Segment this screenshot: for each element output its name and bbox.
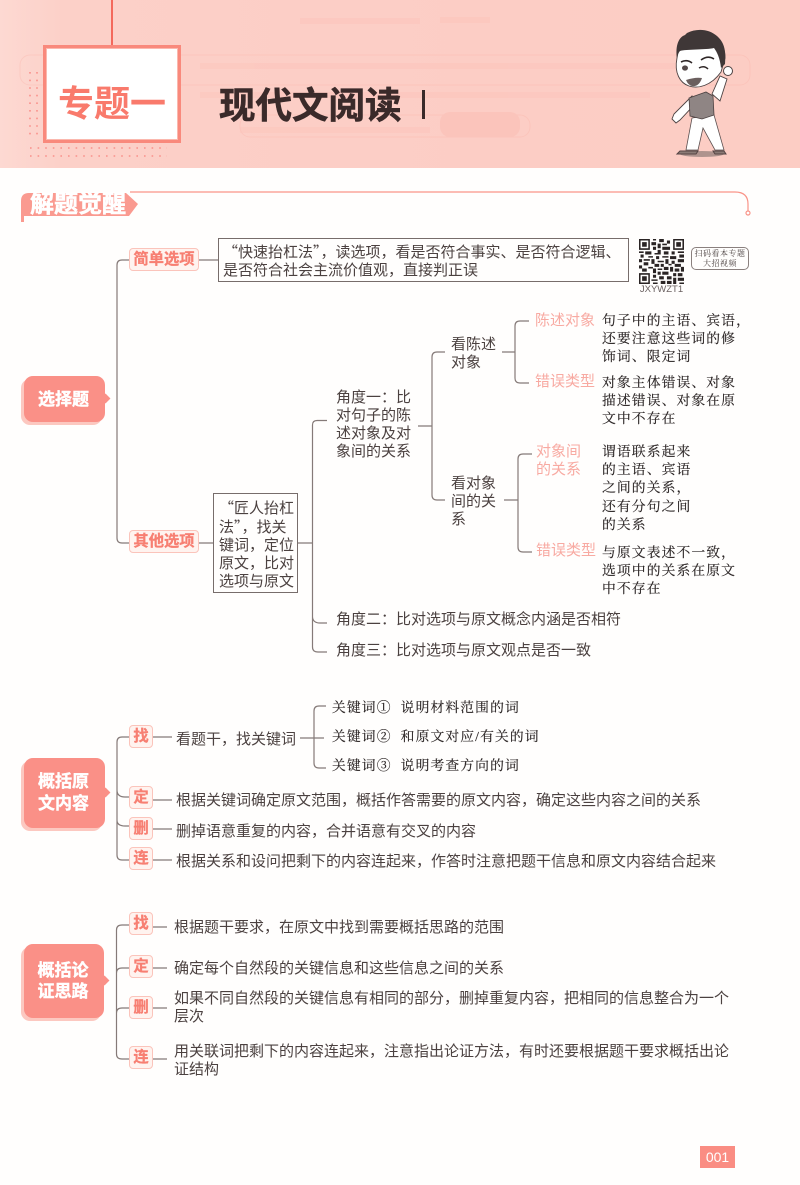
text box: 匠人抬杠法: “匠人抬杠: [219, 497, 294, 518]
text: 对象间的关系说明: 谓语联系起来: [602, 444, 691, 459]
panel: 概括论证思路: 概括论: [38, 961, 88, 980]
title box: 专题一: 专题一: [58, 83, 166, 124]
title bar: [422, 90, 425, 119]
text: 错误类型二说明: 中不存在: [602, 581, 662, 596]
text: 对象间的关系说明: 的关系: [602, 517, 647, 532]
text: 删 说明: [174, 990, 729, 1025]
text: 角度一: 述对象及对: [336, 425, 411, 442]
page number: [700, 1146, 735, 1168]
tag: 删: [129, 996, 153, 1019]
text: 错误类型一说明: [602, 375, 736, 426]
text: 角度一: 对句子的陈: [336, 407, 411, 424]
tag: 其他选项: [129, 530, 199, 553]
text: 删 说明: 层次: [174, 1008, 204, 1025]
panel: 概括论证思路: 证思路: [38, 982, 88, 1001]
label: 对象间的关系: 的关系: [536, 461, 581, 478]
header band: [0, 0, 800, 168]
text: 错误类型二说明: 与原文表述不一致，: [602, 545, 736, 560]
title: 现代文阅读: 现代文阅读: [219, 85, 402, 126]
text: 看陈述对象: 看陈述: [451, 336, 496, 353]
dot pattern: [29, 72, 167, 157]
text: 定 说明: 确定每个自然段的关键信息和这些信息之间的关系: [174, 960, 504, 977]
text: 错误类型二说明: 选项中的关系在原文: [602, 563, 736, 578]
tag: 简单选项: 简单选项: [133, 251, 195, 268]
panel: 概括原文内容: 概括原: [38, 772, 89, 791]
text: 看对象间的关系: 间的关: [451, 493, 496, 510]
text box: 匠人抬杠法: 原文，比对: [219, 555, 294, 572]
page number: 001: [706, 1149, 729, 1165]
text: 连 说明: 根据关系和设问把剩下的内容连起来，作答时注意把题干信息和原文内容结合起来: [176, 853, 716, 870]
tag: 定: [129, 786, 153, 809]
panel: 概括原文内容: [24, 758, 105, 828]
QR note: 大招视频: [703, 259, 737, 268]
text: 错误类型一说明: 文中不存在: [602, 411, 676, 426]
text: 错误类型一说明: 描述错误、对象在原: [602, 393, 736, 408]
text: 看对象间的关系: 系: [451, 511, 466, 528]
text box: 快速抬杠法: 是否符合社会主流价值观，直接判正误: [223, 262, 478, 279]
text box: 快速抬杠法: “快速抬杠法”，读选项，看是否符合事实、是否符合逻辑、: [223, 241, 621, 262]
tag: 连: 连: [133, 1049, 149, 1066]
label: 陈述对象: 陈述对象: [535, 312, 595, 329]
text: 角度三: 角度三：比对选项与原文观点是否一致: [336, 642, 591, 659]
tag: 找: 找: [133, 728, 149, 745]
tag: 连: [129, 1046, 153, 1069]
text box: 匠人抬杠法: 键词，定位: [219, 537, 294, 554]
tag: 连: [129, 847, 153, 870]
text: 陈述对象说明: [602, 313, 751, 364]
text box: 快速抬杠法: [218, 238, 629, 282]
label: 错误类型二: 错误类型: [536, 542, 596, 559]
tag: 简单选项: [129, 248, 199, 271]
panel: 选择题: [24, 376, 105, 422]
text: 关键词②: 关键词② 和原文对应/有关的词: [332, 729, 540, 744]
tag: 连: 连: [133, 850, 149, 867]
tag: 删: 删: [133, 820, 149, 837]
text: 看对象间的关系: 看对象: [451, 475, 496, 492]
text: 错误类型一说明: 对象主体错误、对象: [602, 375, 736, 390]
text: 角度一: [336, 389, 411, 460]
text: 删 说明: 删掉语意重复的内容，合并语意有交叉的内容: [176, 823, 476, 840]
text: 错误类型二说明: [602, 545, 736, 596]
text: 角度二: 角度二：比对选项与原文概念内涵是否相符: [336, 611, 621, 628]
tag: 删: 删: [133, 999, 149, 1016]
text: 对象间的关系说明: 的主语、宾语: [602, 462, 691, 477]
label: 错误类型一: 错误类型: [535, 373, 595, 390]
text: 删 说明: 如果不同自然段的关键信息有相同的部分，删掉重复内容，把相同的信息整合为一个: [174, 990, 729, 1007]
text: 角度一: 象间的关系: [336, 443, 411, 460]
text: 看陈述对象: 对象: [451, 354, 481, 371]
hanging line: [111, 0, 112, 46]
text: 陈述对象说明: 饰词、限定词: [602, 349, 691, 364]
text: 对象间的关系说明: [602, 444, 691, 532]
text: 定 说明: 根据关键词确定原文范围，概括作答需要的原文内容，确定这些内容之间的关系: [176, 792, 701, 809]
text: 看陈述对象: [451, 336, 496, 371]
tag: 找: [129, 912, 153, 935]
icon: QR code: [639, 239, 684, 284]
tag: 找: [129, 725, 153, 748]
tag: 定: 定: [133, 789, 149, 806]
tag: 定: [129, 955, 153, 978]
text: 连 说明: 用关联词把剩下的内容连起来，注意指出论证方法，有时还要根据题干要求概括出论: [174, 1043, 729, 1060]
text: 找 说明: 根据题干要求，在原文中找到需要概括思路的范围: [174, 919, 504, 936]
panel: 概括原文内容: 文内容: [38, 794, 89, 813]
QR caption: JXYWZT1: [640, 284, 683, 295]
text: 对象间的关系说明: 还有分句之间: [602, 499, 691, 514]
panel: 选择题: 选择题: [38, 390, 89, 409]
text box: 匠人抬杠法: 法”，找关: [219, 516, 287, 537]
tag: 其他选项: 其他选项: [133, 533, 195, 550]
text: 关键词①: 关键词① 说明材料范围的词: [332, 700, 520, 715]
text: 陈述对象说明: 句子中的主语、宾语，: [602, 313, 751, 328]
QR note: 扫码看本专题: [694, 249, 746, 258]
tag: 找: 找: [133, 915, 149, 932]
icon: cartoon teacher: [672, 30, 733, 157]
text: 连 说明: [174, 1043, 729, 1078]
title box: 专题一: [43, 45, 181, 143]
text: 看题干: 看题干，找关键词: [176, 731, 296, 748]
tag: 删: [129, 817, 153, 840]
text: 角度一: 角度一：比: [336, 389, 411, 406]
label: 对象间的关系: 对象间: [536, 443, 581, 460]
text: 对象间的关系说明: 之间的关系，: [602, 480, 691, 495]
text box: 匠人抬杠法: [213, 493, 298, 593]
label: 对象间的关系: [536, 443, 581, 478]
text box: 匠人抬杠法: 选项与原文: [219, 573, 294, 590]
text: 关键词③: 关键词③ 说明考查方向的词: [332, 758, 520, 773]
QR note: [691, 247, 749, 270]
panel: 概括论证思路: [24, 944, 104, 1018]
text: 看对象间的关系: [451, 475, 496, 528]
tag: 定: 定: [133, 958, 149, 975]
text: 连 说明: 证结构: [174, 1061, 219, 1078]
text: 陈述对象说明: 还要注意这些词的修: [602, 331, 736, 346]
section heading: 解题觉醒: 解题觉醒: [30, 191, 126, 218]
